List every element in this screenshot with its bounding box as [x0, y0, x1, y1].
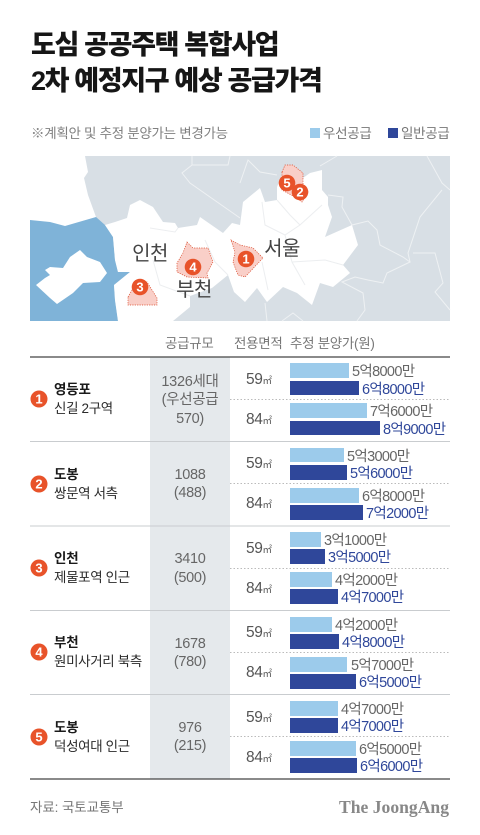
row 1: 영등포: 59㎡ — [246, 371, 272, 388]
row 3: 인천 — [30, 532, 404, 606]
island — [36, 250, 107, 304]
row 4: 부천: 부천 — [54, 635, 78, 650]
row 2: 도봉 쌍문역: 6억8000만 — [362, 488, 425, 505]
row 2: 도봉 쌍문역: 5억3000만 — [347, 448, 410, 465]
row 2: 도봉 쌍문역: 1088 — [174, 467, 206, 483]
row 4: 부천: 4 — [35, 644, 43, 660]
row 5: 도봉 덕성여대: (215) — [174, 738, 206, 754]
row 2: 도봉 쌍문역: 도봉 — [54, 467, 78, 482]
row 1: 영등포: (우선공급 — [162, 391, 218, 408]
row 4: 부천: 59㎡ — [246, 624, 272, 641]
row 3: 인천: 4억7000만 — [341, 589, 404, 606]
row 1: 영등포: 신길 2구역 — [54, 401, 113, 416]
row 3: 인천: 59㎡ — [246, 540, 272, 557]
row 5: 도봉 덕성여대: 덕성여대 인근 — [54, 739, 130, 754]
row 5: 도봉 덕성여대: 4억7000만 — [341, 718, 404, 735]
row 1: 영등포: 1 — [35, 392, 43, 406]
source: 자료: 국토교통부 — [30, 800, 124, 815]
row 1: 영등포: 8억9000만 — [383, 421, 446, 438]
land: Incheon, Bucheon, Seoul — [105, 170, 358, 321]
supply column background — [150, 357, 230, 779]
row 2: 도봉 쌍문역: (488) — [174, 485, 206, 501]
row 1: 영등포: 84㎡ — [246, 411, 272, 428]
row 5: 도봉 덕성여대: 도봉 — [54, 720, 78, 735]
legend: 일반공급 — [401, 126, 449, 141]
map markers: 1 — [242, 252, 250, 266]
row 3: 인천: 4억2000만 — [335, 572, 398, 589]
row 5: 도봉 덕성여대 — [30, 701, 423, 775]
row 4: 부천: 84㎡ — [246, 664, 272, 681]
map place names: 인천 — [132, 242, 168, 265]
row 1: 영등포: 1326세대 — [161, 373, 219, 390]
row 1: 영등포: 5억8000만 — [352, 363, 415, 380]
legend: 우선공급 — [323, 126, 371, 141]
map markers: 2 — [296, 184, 304, 200]
row 2: 도봉 쌍문역: 2 — [35, 476, 43, 492]
row 5: 도봉 덕성여대: 4억7000만 — [341, 701, 404, 718]
row 5: 도봉 덕성여대: 976 — [178, 720, 202, 736]
row 2: 도봉 쌍문역: 84㎡ — [246, 495, 272, 512]
map — [30, 156, 450, 321]
row 4: 부천 — [30, 617, 422, 691]
sea — [30, 217, 130, 321]
row 2: 도봉 쌍문역: 쌍문역 서측 — [54, 486, 118, 501]
row 4: 부천: 5억7000만 — [351, 657, 414, 674]
row 3: 인천: 3 — [35, 560, 43, 576]
table header: 전용면적 — [234, 336, 282, 351]
row 2: 도봉 쌍문역 — [30, 448, 429, 522]
row 5: 도봉 덕성여대: 6억5000만 — [359, 741, 422, 758]
row 4: 부천: 4억2000만 — [335, 617, 398, 634]
row 5: 도봉 덕성여대: 84㎡ — [246, 749, 272, 766]
legend — [310, 126, 449, 141]
row 4: 부천: (780) — [174, 654, 206, 670]
row 3: 인천: 인천 — [54, 551, 78, 566]
map markers — [132, 175, 308, 295]
row 3: 인천: 3410 — [174, 551, 206, 567]
table header: 추정 분양가(원) — [290, 336, 375, 351]
row 5: 도봉 덕성여대: 59㎡ — [246, 709, 272, 726]
row 1: 영등포: 영등포 — [54, 382, 91, 397]
map markers: 3 — [136, 280, 144, 294]
map markers: 4 — [189, 260, 197, 274]
map: 서울 — [264, 237, 300, 260]
note: plan may change: ※계획안 및 추정 분양가는 변경가능 — [31, 126, 228, 141]
map markers: 5 — [283, 176, 291, 190]
row 2: 도봉 쌍문역: 7억2000만 — [366, 505, 429, 522]
table header: 공급규모 — [165, 336, 213, 351]
row 4: 부천: 원미사거리 북측 — [54, 654, 142, 669]
highlighted districts — [128, 165, 308, 305]
row 4: 부천: 6억5000만 — [359, 674, 422, 691]
row 1: 영등포: 7억6000만 — [370, 403, 433, 420]
title — [31, 30, 322, 96]
row 5: 도봉 덕성여대: 6억6000만 — [360, 758, 423, 775]
row 3: 인천: 3억5000만 — [328, 549, 391, 566]
map: 부천 — [176, 278, 212, 301]
title: 도심 공공주택 복합사업 — [31, 30, 278, 60]
row 1: 영등포: 570) — [176, 411, 204, 427]
title: 2차 예정지구 예상 공급가격 — [31, 66, 322, 96]
logo: The JoongAng: The JoongAng — [339, 797, 449, 817]
row 3: 인천: 3억1000만 — [324, 532, 387, 549]
row 2: 도봉 쌍문역: 5억6000만 — [350, 465, 413, 482]
row 2: 도봉 쌍문역: 59㎡ — [246, 455, 272, 472]
row 4: 부천: 1678 — [174, 636, 206, 652]
row 1: 영등포 — [30, 363, 446, 438]
row 4: 부천: 4억8000만 — [342, 634, 405, 651]
row 1: 영등포: 6억8000만 — [362, 381, 425, 398]
row 3: 인천: (500) — [174, 570, 206, 586]
row 5: 도봉 덕성여대: 5 — [35, 730, 43, 744]
row 3: 인천: 84㎡ — [246, 580, 272, 597]
row 3: 인천: 제물포역 인근 — [54, 570, 130, 585]
table header — [165, 336, 375, 351]
